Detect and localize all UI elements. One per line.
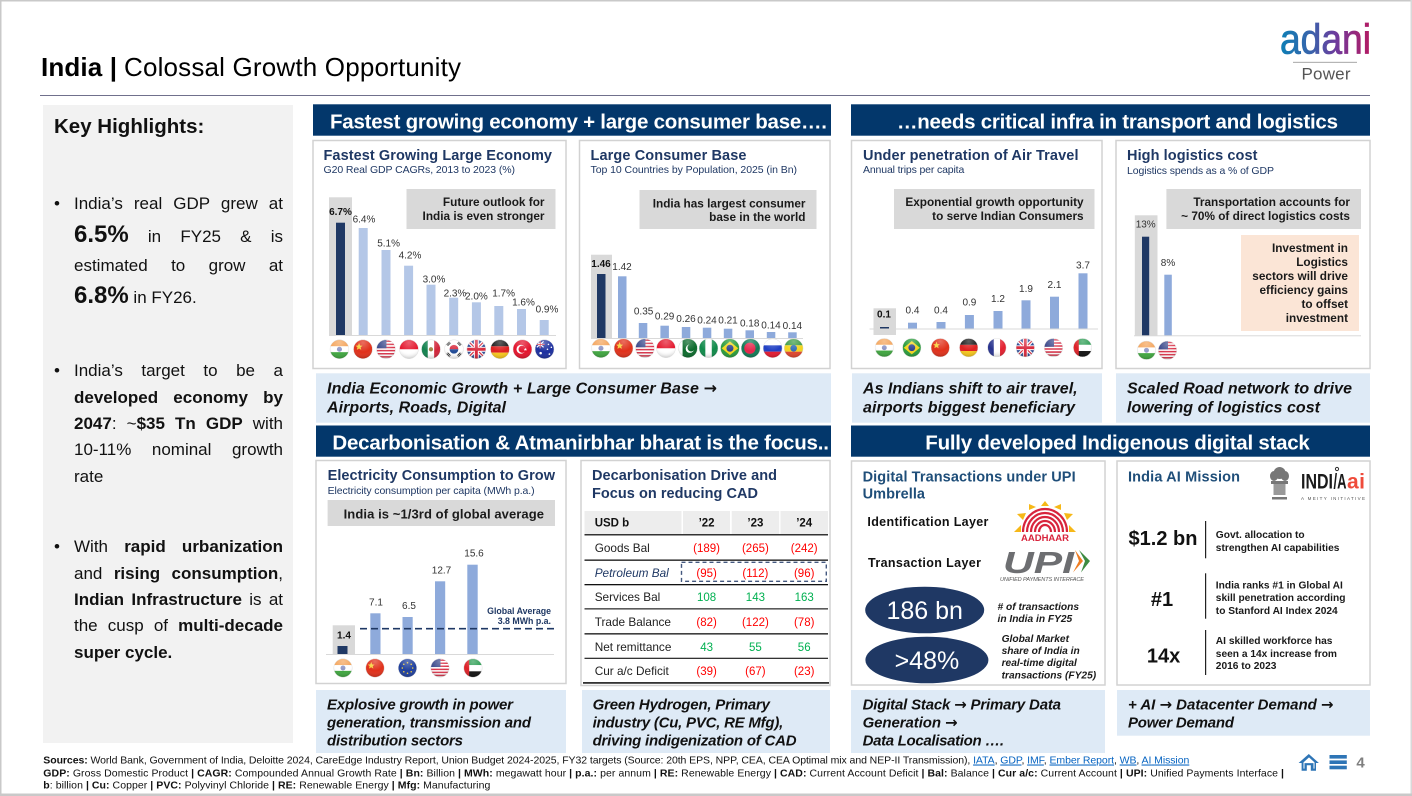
callout: largest consumer base: India has largest consumer xyxy=(653,196,806,210)
heading: Decarbonisation Drive and xyxy=(592,468,777,484)
stat: skill rank xyxy=(1151,573,1345,619)
callout: datacenter demand: + AI → Datacenter Demand → xyxy=(1128,695,1334,713)
flags row xyxy=(334,658,482,678)
table: 108 xyxy=(697,592,716,604)
title: Colossal Growth Opportunity xyxy=(124,52,461,82)
bullet: urbanization: super cycle. xyxy=(74,643,172,662)
callout: air travel: As Indians shift to air travel, xyxy=(862,380,1078,398)
panel: key highlights xyxy=(43,105,293,743)
bullet: urbanization: • xyxy=(54,537,60,556)
logo: aadhaar: AADHAAR xyxy=(1021,533,1069,544)
logo: indiaai xyxy=(1301,467,1365,501)
logo: adani power: Power xyxy=(1302,64,1351,84)
page number: 4 xyxy=(1356,754,1365,772)
subheading: Electricity consumption per capita (MWh p.a.) xyxy=(328,485,535,497)
callout: digital stack: Digital Stack → Primary Data xyxy=(863,695,1061,713)
callout: largest consumer base: base in the world xyxy=(709,210,806,224)
callout: investment in logistics: efficiency gains xyxy=(1259,283,1348,297)
callout: future outlook: India is even stronger xyxy=(423,209,545,223)
identification layer label: Identification Layer xyxy=(867,515,989,529)
icon: national emblem xyxy=(1270,467,1289,500)
bar chart: air trips: 1.2 xyxy=(991,294,1005,305)
callout: power generation: distribution sectors xyxy=(327,732,463,749)
subheading: G20 Real GDP CAGRs, 2013 to 2023 (%) xyxy=(324,164,515,176)
table: 55 xyxy=(749,642,762,654)
logo: UPI: UPI xyxy=(1003,545,1076,580)
metric text: market share: real-time digital xyxy=(1002,658,1077,669)
table: ’24 xyxy=(796,518,813,530)
callout: global average share: India is ~1/3rd of global average xyxy=(344,506,544,521)
bullet: urbanization: and rising consumption, xyxy=(74,564,283,583)
bullet: developed economy: 10-11% nominal growth xyxy=(74,440,283,459)
bar chart: air trips: 0.1 xyxy=(877,310,891,321)
bar chart: population: 0.29 xyxy=(655,311,675,322)
footnotes: GDP: Gross Domestic Product | CAGR: Compounded Annual Growth Rate | Bn: Billion | MWh: megawatt hour | p.a.: per annum | RE: Renewable Energy | CAD: Current Account Deficit | Bal: Balance | Cur a/c: Current Account | UPI: Unified Payments Interface | xyxy=(43,768,1284,780)
callout: road network: Scaled Road network to drive xyxy=(1127,380,1352,398)
bar chart: air trips: 0.4 xyxy=(906,306,920,317)
stat: workforce: AI skilled workforce has xyxy=(1216,636,1333,647)
panel: digital transactions under UPI xyxy=(852,461,1105,685)
callout: green hydrogen: driving indigenization of CAD xyxy=(593,732,797,749)
bar chart: air trips: 2.1 xyxy=(1048,280,1062,291)
footnotes: Sources: World Bank, Government of India, Deloitte 2024, CareEdge Industry Report, Union Budget 2024-2025, FY32 targets (Source: 20th EPS, NPP, CEA, CEA Optimal mix and NEP-II Transmission), IATA, GDP, IMF, Ember Report, WB, AI Mission xyxy=(43,754,1189,766)
bullet: GDP growth xyxy=(54,194,283,309)
metric text: market share: Global Market xyxy=(1002,634,1070,645)
table: 143 xyxy=(746,592,765,604)
bar chart: population: 0.18 xyxy=(740,318,760,329)
bullet: GDP growth: 6.5% in FY25 & is xyxy=(74,221,283,248)
stat: allocation xyxy=(1129,521,1340,558)
heading: Key Highlights: xyxy=(54,115,204,138)
table: (39) xyxy=(696,666,717,678)
flags row xyxy=(330,340,554,359)
callout: exponential growth: Exponential growth opportunity xyxy=(905,195,1084,209)
bar chart: GDP CAGR: 1.6% xyxy=(512,297,535,308)
table: Goods Bal xyxy=(595,541,650,555)
bullet: urbanization xyxy=(54,537,283,662)
logo: adani power: adani xyxy=(1280,15,1371,62)
bullet: GDP growth: • xyxy=(54,194,60,213)
stat: allocation: strengthen AI capabilities xyxy=(1216,543,1340,554)
bar chart: logistics spend: 13% xyxy=(1136,220,1156,231)
section header: digital stack xyxy=(851,426,1370,457)
subheading: Top 10 Countries by Population, 2025 (in Bn) xyxy=(590,164,797,176)
table: (96) xyxy=(794,568,815,580)
icon: home xyxy=(1299,754,1319,771)
bar chart: GDP CAGR: 6.4% xyxy=(353,214,376,225)
bar chart: population: 1.46 xyxy=(591,259,611,270)
section header: fastest growing economy: Fastest growing economy + large consumer base…. xyxy=(330,110,827,134)
table: (78) xyxy=(794,617,815,629)
bar chart: population: 0.14 xyxy=(783,321,803,332)
bar chart: population: 0.35 xyxy=(634,306,654,317)
stat: allocation: Govt. allocation to xyxy=(1216,530,1305,541)
bar chart: logistics spend xyxy=(1134,215,1361,336)
bar chart: electricity per capita: 15.6 xyxy=(464,548,484,559)
bullet: developed economy: rate xyxy=(74,467,103,486)
bullet: urbanization: Indian Infrastructure is at xyxy=(74,590,283,609)
bar chart: air trips: 0.4 xyxy=(934,306,948,317)
table: (67) xyxy=(745,666,766,678)
callout: green hydrogen: Green Hydrogen, Primary xyxy=(593,696,771,713)
metric text: market share xyxy=(1002,634,1097,682)
heading: Fastest Growing Large Economy xyxy=(324,148,552,164)
callout: economic growth: India Economic Growth + Large Consumer Base → xyxy=(327,378,717,398)
table: ’22 xyxy=(699,518,715,530)
footnotes: b: billion | Cu: Copper | PVC: Polyvinyl Chloride | RE: Renewable Energy | Mfg: Manufacturing xyxy=(43,780,490,792)
callout: green hydrogen xyxy=(582,690,830,753)
section header: critical infra: …needs critical infra in transport and logistics xyxy=(897,110,1338,134)
table: (82) xyxy=(696,617,717,629)
bar chart: air trips: 1.9 xyxy=(1019,284,1033,295)
metric text: transactions: # of transactions xyxy=(998,602,1079,613)
table: (23) xyxy=(794,666,815,678)
table: Net remittance xyxy=(595,640,672,654)
heading: Digital Transactions under UPI xyxy=(863,470,1076,486)
bar chart: electricity per capita: 1.4 xyxy=(337,630,351,641)
panel: india AI mission xyxy=(1117,461,1370,685)
bar chart: air trips: 3.7 xyxy=(1076,261,1090,272)
heading: High logistics cost xyxy=(1127,148,1258,164)
bullet: developed economy: 2047: ~$35 Tn GDP with xyxy=(74,414,283,433)
callout: future outlook: Future outlook for xyxy=(443,195,545,209)
bar chart: air trips: 0.9 xyxy=(962,298,977,309)
table: (95) xyxy=(696,568,717,580)
table: USD b xyxy=(595,518,629,530)
heading xyxy=(592,468,777,502)
logo: UPI xyxy=(1000,545,1090,583)
flags row xyxy=(1137,341,1177,360)
callout: power generation: generation, transmission and xyxy=(326,714,532,731)
table: ’23 xyxy=(747,518,763,530)
subheading: Logistics spends as a % of GDP xyxy=(1127,165,1274,177)
bar chart: GDP CAGR: 5.1% xyxy=(377,238,400,249)
heading xyxy=(863,470,1076,502)
stat: skill rank: #1 xyxy=(1151,589,1173,611)
title: India | xyxy=(41,52,117,82)
logo: UPI: UNIFIED PAYMENTS INTERFACE xyxy=(1000,577,1084,583)
stat: allocation: $1.2 bn xyxy=(1129,528,1197,550)
metric text: market share: transactions (FY25) xyxy=(1002,670,1097,682)
table: Petroleum Bal xyxy=(595,566,669,580)
bullet: urbanization: the cusp of multi-decade xyxy=(74,616,283,635)
callout: datacenter demand: Power Demand xyxy=(1128,714,1235,731)
metric: 186 bn xyxy=(865,587,984,633)
logo: indiaai: A MEITY INITIATIVE xyxy=(1301,496,1365,501)
bar chart: GDP CAGR: 6.7% xyxy=(329,207,352,218)
bullet: developed economy: India’s target to be a xyxy=(74,361,283,380)
table: 56 xyxy=(798,642,811,654)
bullet: developed economy: developed economy by xyxy=(74,388,283,407)
bullet: urbanization: With rapid urbanization xyxy=(74,537,283,556)
callout: digital stack xyxy=(851,690,1105,753)
flags row xyxy=(875,338,1092,357)
metric: 48 percent xyxy=(865,637,988,683)
bar chart: GDP CAGR: 4.2% xyxy=(399,250,422,261)
callout: investment in logistics: sectors will drive xyxy=(1252,269,1348,283)
bar chart: electricity per capita: 6.5 xyxy=(402,601,416,612)
bar chart: population: 0.26 xyxy=(676,314,696,325)
heading: Umbrella xyxy=(863,486,926,502)
table: 163 xyxy=(795,592,814,604)
metric text: market share: share of India in xyxy=(1002,646,1080,657)
metric text: transactions: in India in FY25 xyxy=(998,614,1073,625)
bar chart: population: 0.24 xyxy=(697,315,717,326)
table: Trade Balance xyxy=(595,615,671,629)
callout: investment in logistics: investment xyxy=(1286,311,1348,325)
callout: datacenter demand xyxy=(1117,690,1370,736)
table: Cur a/c Deficit xyxy=(595,664,669,678)
stat: workforce xyxy=(1147,630,1337,675)
panel: under penetration of air travel xyxy=(852,140,1102,368)
bar chart: GDP CAGR: 2.0% xyxy=(465,291,488,302)
panel: decarbonisation table xyxy=(581,460,830,686)
table: (112) xyxy=(742,568,769,580)
callout: power generation xyxy=(316,690,566,753)
stat: workforce: 14x xyxy=(1147,645,1180,667)
table xyxy=(583,511,829,684)
callout: investment in logistics xyxy=(1241,235,1359,331)
bar chart: air trips xyxy=(870,261,1098,335)
metric: 186 bn: 186 bn xyxy=(886,597,963,625)
panel: large consumer base xyxy=(580,140,830,368)
heading: Under penetration of Air Travel xyxy=(863,148,1078,164)
stat: skill rank: India ranks #1 in Global AI xyxy=(1216,581,1343,592)
heading: India AI Mission xyxy=(1128,470,1240,486)
callout: investment in logistics: to offset xyxy=(1301,297,1348,311)
transaction layer label: Transaction Layer xyxy=(868,556,981,570)
section header: digital stack: Fully developed Indigenous digital stack xyxy=(925,432,1310,454)
callout: investment in logistics: Investment in xyxy=(1272,241,1348,255)
subheading: Annual trips per capita xyxy=(863,164,964,176)
heading: Focus on reducing CAD xyxy=(592,486,758,502)
bar chart: GDP CAGR: 1.7% xyxy=(492,288,515,299)
footnotes xyxy=(43,754,1284,792)
logo: indiaai: /A xyxy=(1334,470,1346,493)
bar chart: electricity per capita: 12.7 xyxy=(432,565,452,576)
table: 43 xyxy=(700,642,713,654)
logo: aadhaar xyxy=(1014,501,1076,544)
bar chart: electricity per capita xyxy=(326,548,556,655)
stat: skill rank: to Stanford AI Index 2024 xyxy=(1216,606,1338,617)
metric text: transactions xyxy=(998,602,1079,625)
bar chart: population: 0.21 xyxy=(718,315,738,326)
panel: electricity consumption xyxy=(316,460,566,684)
callout: largest consumer base xyxy=(640,190,816,229)
table: (122) xyxy=(742,617,769,629)
table: Services Bal xyxy=(595,590,660,604)
bullet: developed economy xyxy=(54,361,283,486)
flags row xyxy=(591,338,803,358)
global average label: 3.8 MWh p.a. xyxy=(498,616,551,626)
callout: transportation share xyxy=(1166,189,1361,229)
logo: adani power xyxy=(1280,15,1371,83)
global average label xyxy=(487,606,551,626)
bar chart: logistics spend: 8% xyxy=(1161,258,1175,269)
bullet: GDP growth: estimated to grow at xyxy=(74,256,283,275)
callout: investment in logistics: Logistics xyxy=(1296,255,1348,269)
stat: workforce: 2016 to 2023 xyxy=(1216,661,1277,672)
heading: Large Consumer Base xyxy=(590,148,746,164)
callout: air travel: airports biggest beneficiary xyxy=(863,400,1076,416)
bar chart: population: 1.42 xyxy=(612,262,632,273)
section header: decarbonisation: Decarbonisation & Atmanirbhar bharat is the focus.. xyxy=(332,432,829,454)
bar chart: GDP CAGR: 0.9% xyxy=(536,304,559,315)
callout: digital stack: Data Localisation …. xyxy=(863,732,1004,749)
callout: digital stack: Generation → xyxy=(863,713,958,731)
table: (265) xyxy=(742,543,769,555)
callout: economic growth xyxy=(316,373,831,423)
logo: indiaai: INDI xyxy=(1301,470,1333,493)
bar chart: GDP CAGR: 3.0% xyxy=(423,274,446,285)
callout: exponential growth: to serve Indian Consumers xyxy=(932,209,1084,223)
bar chart: GDP CAGR xyxy=(329,197,559,336)
icon: menu xyxy=(1330,755,1347,769)
stat: workforce: seen a 14x increase from xyxy=(1216,649,1337,660)
bullet: developed economy: • xyxy=(54,361,60,380)
metric: 48 percent: >48% xyxy=(895,647,959,675)
callout: global average share xyxy=(328,500,555,526)
table: (189) xyxy=(693,543,720,555)
callout: air travel xyxy=(852,373,1102,423)
callout: road network: lowering of logistics cost xyxy=(1127,400,1321,416)
callout: green hydrogen: industry (Cu, PVC, RE Mfg), xyxy=(593,714,783,731)
callout: exponential growth xyxy=(894,189,1094,229)
callout: economic growth: Airports, Roads, Digital xyxy=(326,400,507,416)
callout: future outlook xyxy=(406,189,556,229)
bullet: GDP growth: 6.8% in FY26. xyxy=(74,282,197,309)
section header: critical infra xyxy=(851,104,1370,136)
bar chart: GDP CAGR: 2.3% xyxy=(444,288,467,299)
heading: Electricity Consumption to Grow xyxy=(328,468,556,484)
callout: transportation share: Transportation accounts for xyxy=(1193,195,1350,209)
bar chart: electricity per capita: 7.1 xyxy=(369,597,383,608)
callout: transportation share: ~ 70% of direct logistics costs xyxy=(1181,209,1350,223)
stat: skill rank: skill penetration according xyxy=(1216,593,1345,604)
bullet: GDP growth: India’s real GDP grew at xyxy=(74,194,283,213)
panel: fastest growing large economy xyxy=(313,140,566,368)
bar chart: population xyxy=(591,255,803,339)
global average label: Global Average xyxy=(487,606,551,616)
callout: road network xyxy=(1116,373,1370,423)
logo: indiaai: ai xyxy=(1347,470,1365,493)
bar chart: population: 0.14 xyxy=(761,320,781,331)
panel: high logistics cost xyxy=(1116,140,1370,368)
callout: power generation: Explosive growth in power xyxy=(327,696,514,713)
table: (242) xyxy=(791,543,818,555)
